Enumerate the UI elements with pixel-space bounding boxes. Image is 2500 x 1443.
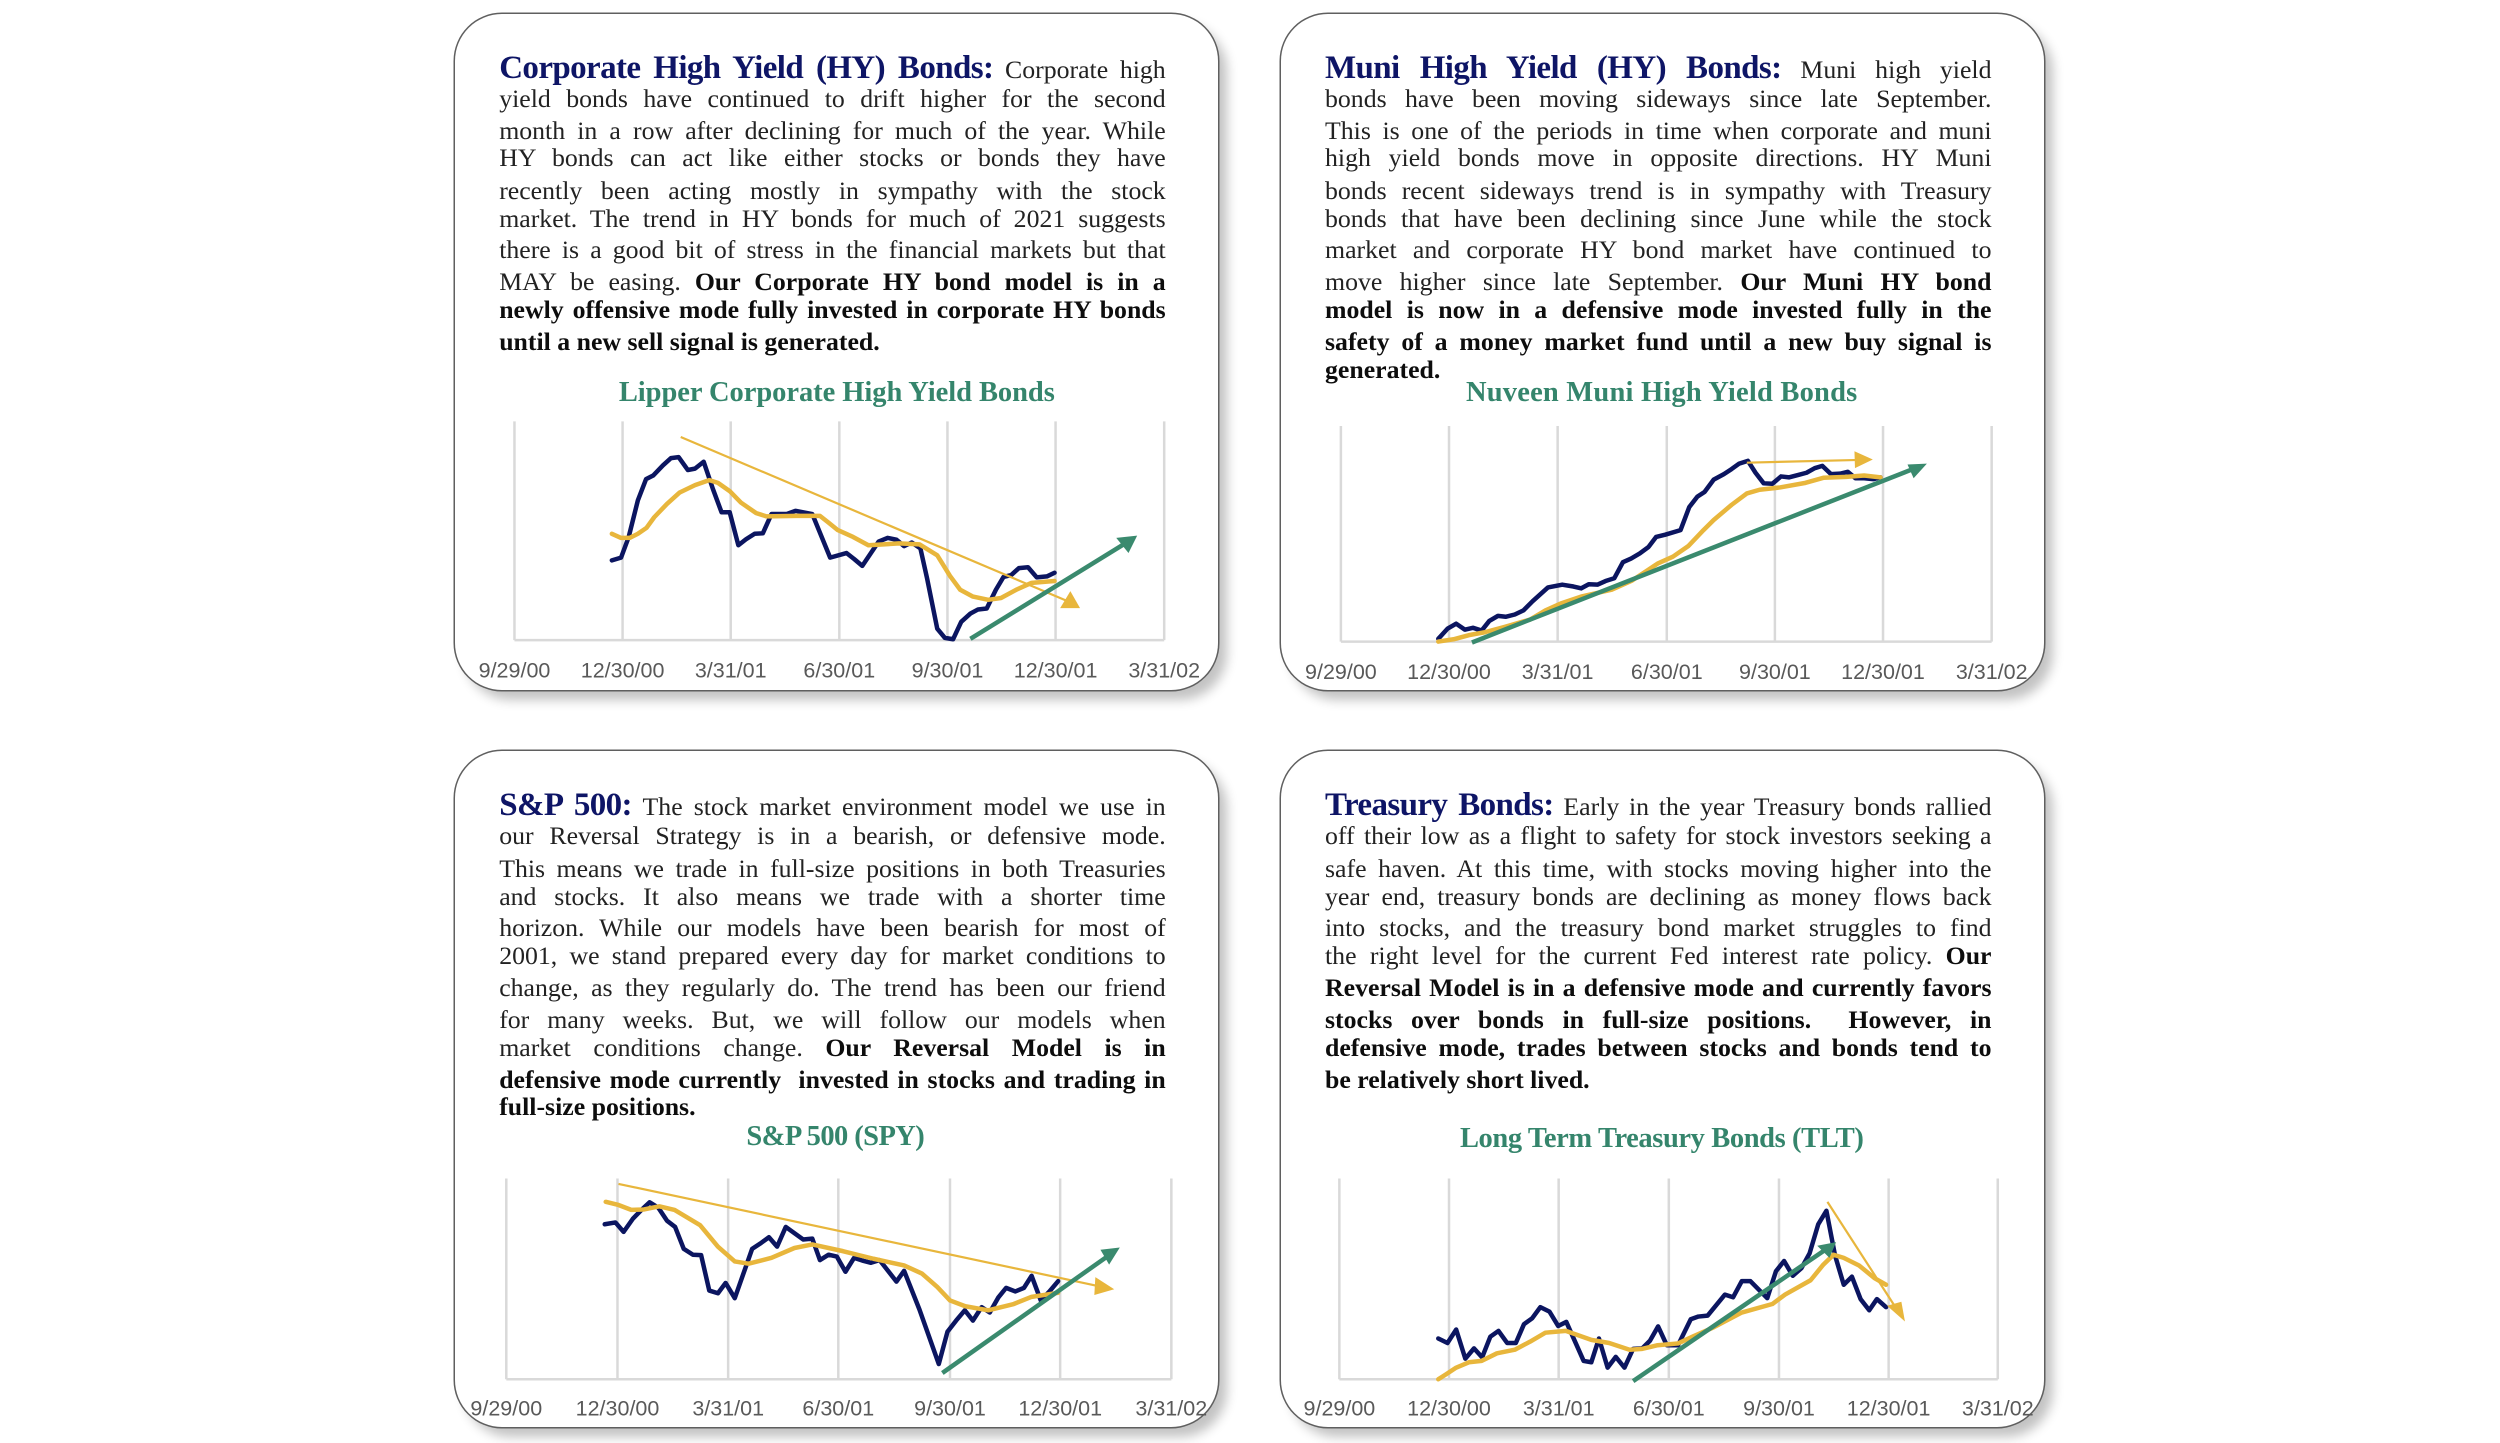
text block: S&P 500 commentary [499,787,1166,1121]
text block: corporate high yield commentary: HY bonds can act like either stocks or bonds they have [499,143,1166,172]
text block: S&P 500 commentary: for many weeks. But, we will follow our models when [499,1005,1166,1034]
text block: corporate high yield commentary: yield bonds have continued to drift higher for the second [499,84,1166,113]
chart title: S&P 500 (SPY) [746,1121,924,1152]
text block: treasury bonds commentary: defensive mode, trades between stocks and bonds tend to [1325,1033,1992,1062]
line chart: Lipper Corporate High Yield Bonds [479,421,1200,683]
x axis labels [1305,660,2028,684]
gold moving average line [1438,476,1880,642]
text block: S&P 500 commentary: market conditions change. Our Reversal Model is in [499,1033,1166,1062]
x axis labels: 3/31/01 [695,659,767,683]
text block: corporate high yield commentary: month in a row after declining for much of the year. While [499,116,1166,145]
chart title: Nuveen Muni High Yield Bonds [1466,376,1857,408]
text block: muni high yield commentary: bonds that have been declining since June while the stock [1325,204,1992,233]
arrow: green uptrend [1633,1242,1836,1381]
gold moving average line [1438,1255,1886,1379]
x axis labels [479,659,1200,683]
text block: corporate high yield commentary: recently been acting mostly in sympathy with the stock [499,176,1166,204]
x axis labels: 9/30/01 [1743,1397,1815,1421]
gold moving average line [612,480,1055,600]
text block: treasury bonds commentary: the right level for the current Fed interest rate policy. Our [1325,941,1992,970]
x axis labels: 9/29/00 [470,1397,542,1421]
x axis labels: 3/31/01 [1522,660,1593,684]
x axis labels: 6/30/01 [1633,1397,1705,1421]
chart title: Long Term Treasury Bonds (TLT) [1460,1123,1863,1154]
text block: muni high yield commentary: bonds recent sideways trend is in sympathy with Treasury [1325,176,1992,204]
gold moving average line [606,1202,1058,1310]
x axis labels: 12/30/00 [1407,1397,1491,1421]
x axis labels: 3/31/01 [692,1397,764,1421]
panel: Muni High Yield Bonds [1281,14,2044,690]
x axis labels: 12/30/00 [576,1397,659,1421]
x axis labels: 9/29/00 [479,659,550,683]
text block: corporate high yield commentary: Corporate High Yield (HY) Bonds: Corporate high [499,50,1166,86]
text block: S&P 500 commentary: our Reversal Strategy is in a bearish, or defensive mode. [499,821,1166,850]
panel: S&P 500 [455,751,1218,1427]
arrow: gold sideways trend [1747,451,1873,468]
x axis labels: 12/30/00 [581,659,664,683]
x axis labels [1304,1397,2034,1421]
x axis labels: 9/30/01 [1739,660,1811,684]
text block: S&P 500 commentary: defensive mode currently invested in stocks and trading in [499,1065,1166,1094]
line chart: Nuveen Muni High Yield Bonds [1305,426,2028,684]
text block: treasury bonds commentary: stocks over bonds in full-size positions. However, in [1325,1005,1992,1034]
text block: treasury bonds commentary: be relatively short lived. [1325,1065,1590,1094]
arrow: green uptrend [970,536,1137,639]
text block: treasury bonds commentary: safe haven. At this time, with stocks moving higher into the [1325,854,1992,883]
x axis labels: 12/30/01 [1847,1397,1930,1421]
text block: corporate high yield commentary: newly offensive mode fully invested in corporate HY bonds [499,295,1166,324]
text block: corporate high yield commentary: market. The trend in HY bonds for much of 2021 suggests [499,204,1166,233]
text block: muni high yield commentary [1325,50,1992,384]
text block: treasury bonds commentary: off their low as a flight to safety for stock investors seeking a [1325,821,1992,850]
panel: Treasury Bonds [1281,751,2044,1427]
chart title: Lipper Corporate High Yield Bonds [619,376,1055,408]
arrow: green uptrend [1472,464,1927,642]
x axis labels: 12/30/01 [1018,1397,1102,1421]
text block: muni high yield commentary: Muni High Yield (HY) Bonds: Muni high yield [1325,50,1992,86]
x axis labels [470,1397,1207,1421]
text block: S&P 500 commentary: full-size positions. [499,1092,696,1121]
text block: muni high yield commentary: high yield bonds move in opposite directions. HY Muni [1325,143,1992,172]
arrow: gold downtrend [618,1184,1114,1295]
x axis labels: 12/30/00 [1407,660,1491,684]
text block: corporate high yield commentary: there is a good bit of stress in the financial markets but that [499,235,1166,264]
text block: muni high yield commentary: market and corporate HY bond market have continued to [1325,235,1992,264]
x axis labels: 3/31/02 [1956,660,2028,684]
text block: corporate high yield commentary: until a new sell signal is generated. [499,327,880,356]
text block: corporate high yield commentary [499,50,1166,356]
text block: muni high yield commentary: safety of a money market fund until a new buy signal is [1325,327,1992,356]
text block: treasury bonds commentary [1325,787,1992,1094]
text block: treasury bonds commentary: year end, treasury bonds are declining as money flows back [1325,882,1992,911]
x axis labels: 9/30/01 [912,659,983,683]
line chart: Long Term Treasury Bonds TLT [1304,1178,2034,1421]
text block: treasury bonds commentary: Treasury Bonds: Early in the year Treasury bonds rallied [1325,787,1992,823]
text block: muni high yield commentary: model is now in a defensive mode invested fully in the [1325,295,1992,324]
x axis labels: 9/30/01 [914,1397,986,1421]
x axis labels: 6/30/01 [802,1397,874,1421]
text block: muni high yield commentary: move higher since late September. Our Muni HY bond [1325,267,1992,296]
x axis labels: 6/30/01 [803,659,875,683]
x axis labels: 3/31/02 [1135,1397,1207,1421]
text block: muni high yield commentary: This is one of the periods in time when corporate and muni [1325,116,1992,145]
text block: muni high yield commentary: generated. [1325,355,1440,384]
x axis labels: 3/31/02 [1962,1397,2034,1421]
text block: muni high yield commentary: bonds have been moving sideways since late September. [1325,84,1992,113]
text block: S&P 500 commentary: 2001, we stand prepared every day for market conditions to [499,941,1166,970]
x axis labels: 9/29/00 [1304,1397,1375,1421]
x axis labels: 3/31/01 [1523,1397,1595,1421]
navy price line [1438,1211,1886,1368]
arrow: gold downtrend [681,437,1080,608]
text block: S&P 500 commentary: horizon. While our models have been bearish for most of [499,913,1166,942]
text block: corporate high yield commentary: MAY be easing. Our Corporate HY bond model is in a [499,267,1166,296]
x axis labels: 3/31/02 [1128,659,1200,683]
x axis labels: 6/30/01 [1631,660,1703,684]
line chart: S&P 500 SPY [470,1178,1207,1421]
x axis labels: 9/29/00 [1305,660,1377,684]
text block: S&P 500 commentary: and stocks. It also means we trade with a shorter time [499,882,1166,911]
arrow: green uptrend [942,1248,1120,1373]
navy price line [605,1202,1058,1364]
text block: S&P 500 commentary: S&P 500: The stock market environment model we use in [499,787,1166,823]
text block: treasury bonds commentary: into stocks, and the treasury bond market struggles to find [1325,913,1992,942]
navy price line [612,457,1055,639]
navy price line [1438,461,1880,639]
text block: S&P 500 commentary: change, as they regularly do. The trend has been our friend [499,973,1166,1002]
panel: Corporate High Yield Bonds [455,14,1218,690]
x axis labels: 12/30/01 [1841,660,1925,684]
x axis labels: 12/30/01 [1014,659,1097,683]
arrow: gold downtrend [1827,1202,1905,1321]
text block: treasury bonds commentary: Reversal Model is in a defensive mode and currently favors [1325,973,1992,1002]
text block: S&P 500 commentary: This means we trade in full-size positions in both Treasuries [499,854,1166,883]
